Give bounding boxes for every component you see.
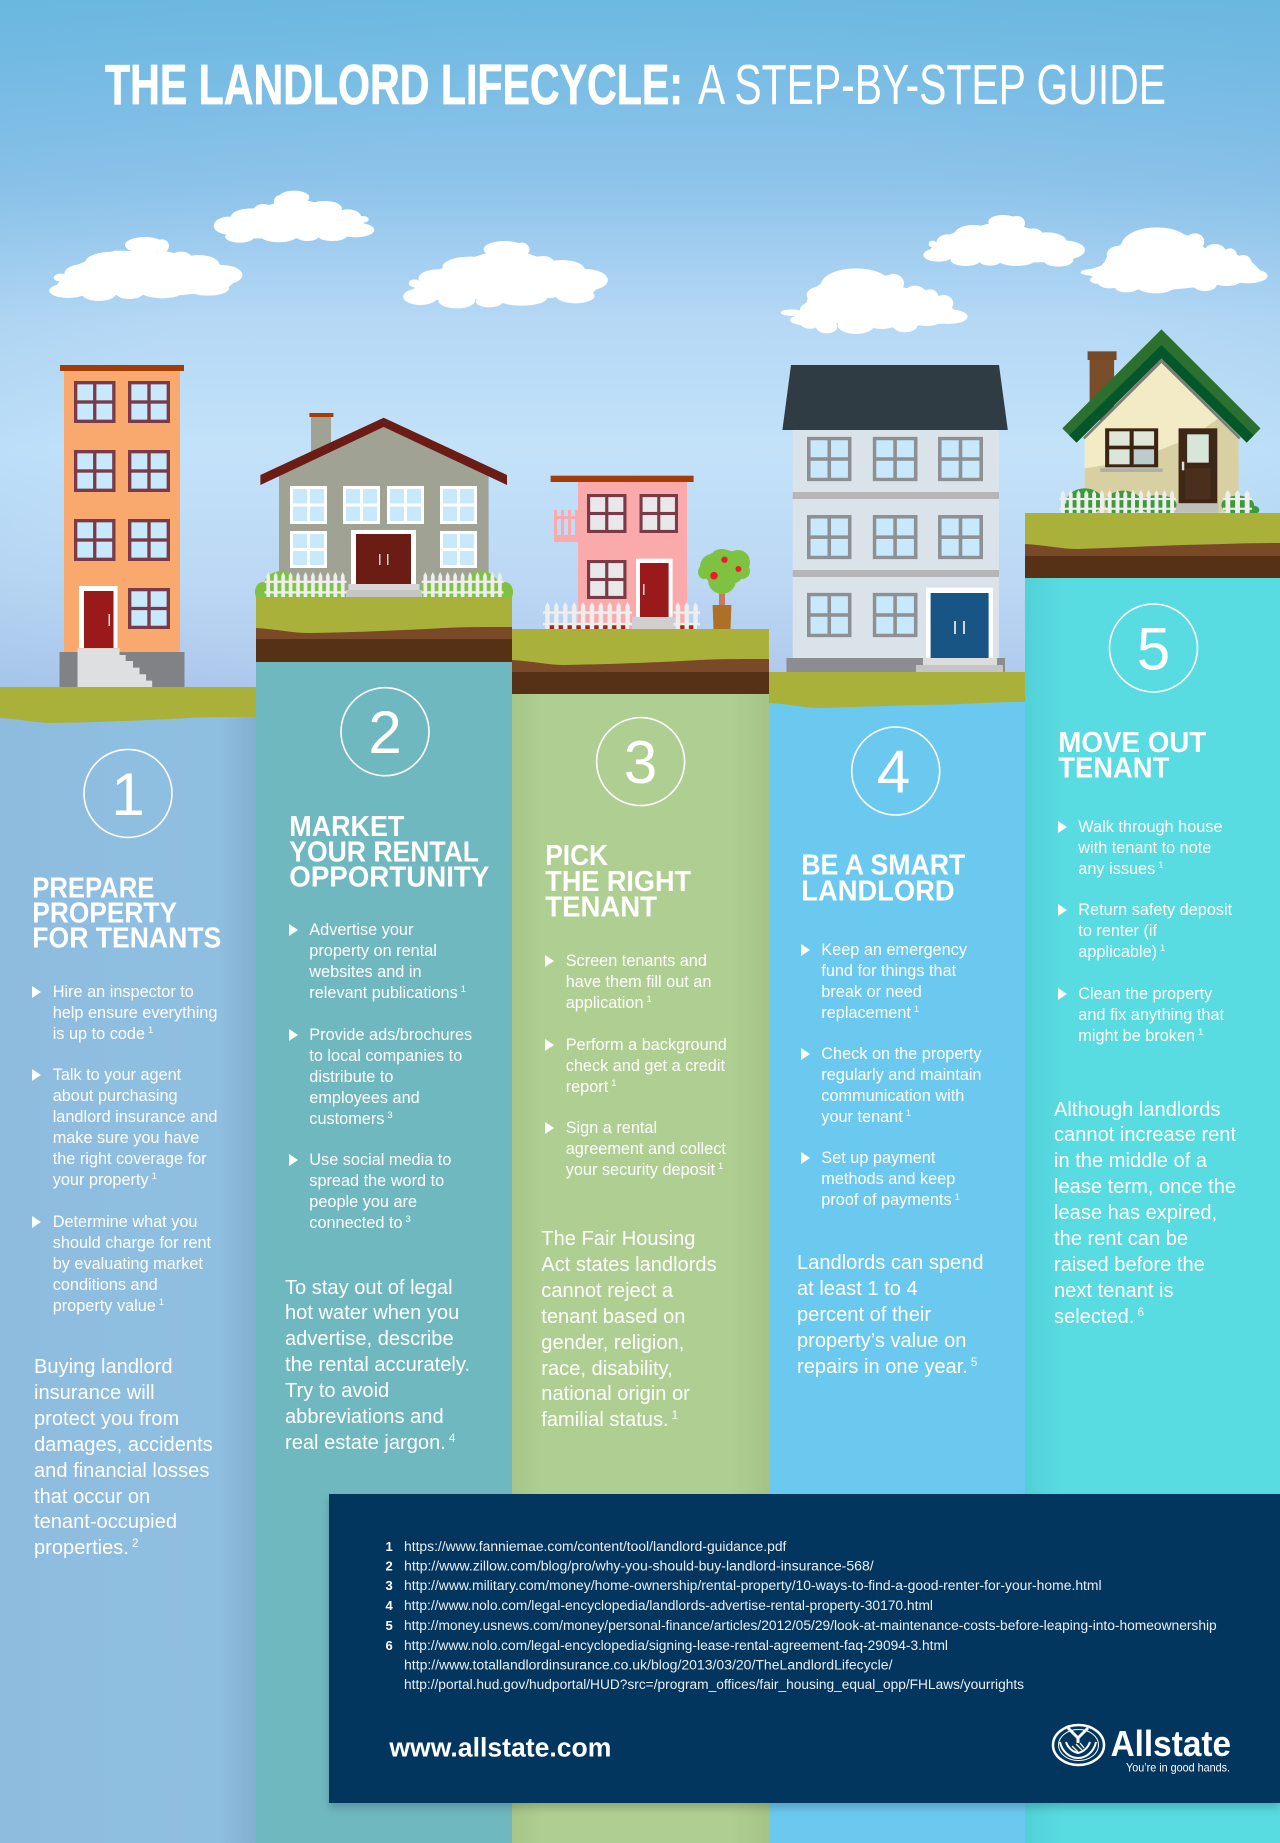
footer source list and logo	[386, 1539, 1231, 1775]
ground: step 1	[0, 687, 256, 723]
step 5 number badge and heading: 5	[1137, 616, 1170, 682]
step 1 bullet: inspector: Hire an inspector to	[53, 982, 194, 1000]
panel: step 4 smart landlord	[769, 690, 1025, 1843]
step 2 bullet: advertise: relevant publications 1	[309, 984, 466, 1002]
step 3 paragraph: The Fair Housing	[541, 1228, 695, 1250]
step 2 bullet: advertise	[309, 920, 466, 1006]
step 5 bullet: walk through: with tenant to note	[1078, 838, 1211, 856]
step 2 paragraph: abbreviations and	[285, 1406, 444, 1428]
step 1 bullet: inspector: is up to code 1	[53, 1024, 153, 1042]
step 3 number badge and heading: THE RIGHT	[545, 866, 692, 898]
step 3 bullet: background check: report 1	[566, 1078, 616, 1096]
source urls: http://portal.hud.gov/hudportal/HUD?src=/program_offices/fair_housing_equal_opp/FHLaws/yourrights	[404, 1677, 1024, 1692]
step 5 number badge and heading	[1058, 603, 1207, 785]
step 1 number badge and heading: PROPERTY	[32, 897, 177, 929]
step 2 bullet: brochures	[309, 1024, 472, 1132]
step 4 bullet: emergency fund: fund for things that	[821, 962, 956, 980]
building 4: tall grey house	[782, 365, 1008, 672]
step 1 bullet: rent: property value 1	[53, 1297, 164, 1315]
step 4 bullet: payment: methods and keep	[821, 1170, 955, 1188]
step 3 paragraph: tenant based on	[541, 1306, 685, 1328]
step 5 bullet: walk through	[1078, 816, 1222, 882]
step 1 bullet: rent: should charge for rent	[53, 1234, 211, 1252]
panel: step 2 market rental	[256, 662, 512, 1843]
step 1 bullet: agent: about purchasing	[53, 1087, 178, 1105]
cloud: lower middle	[403, 241, 608, 308]
step 2 paragraph	[285, 1276, 470, 1454]
step 5 bullet: walk through: Walk through house	[1078, 818, 1222, 836]
building 5: cream cottage	[1059, 329, 1261, 516]
step 5 paragraph: lease term, once the	[1054, 1176, 1236, 1198]
source urls: http://www.zillow.com/blog/pro/why-you-should-buy-landlord-insurance-568/	[404, 1558, 874, 1574]
step 1 paragraph: damages, accidents	[34, 1434, 213, 1456]
step 2 bullet: brochures: employees and	[309, 1088, 420, 1106]
step 1 bullet: inspector: help ensure everything	[53, 1004, 217, 1022]
step 2 number badge and heading: MARKET	[289, 811, 405, 843]
step 2 paragraph: hot water when you	[285, 1302, 459, 1324]
step 1 number badge and heading: PREPARE	[32, 872, 154, 904]
step 1 bullet: rent: conditions and	[53, 1276, 158, 1294]
step 3 bullet: screen	[566, 951, 711, 1016]
step 1 bullet: agent: Talk to your agent	[53, 1066, 181, 1084]
step 1 bullet: rent	[53, 1212, 211, 1319]
step 5 bullet: deposit: to renter (if	[1078, 922, 1157, 940]
step 5 bullet: walk through: any issues 1	[1078, 860, 1163, 878]
step 2 bullet: brochures: distribute to	[309, 1068, 393, 1086]
step 3 number badge and heading: 3	[624, 729, 657, 796]
ground: step 5	[1025, 513, 1280, 578]
step 3 paragraph: cannot reject a	[541, 1280, 673, 1302]
step 1 bullet: agent: landlord insurance and	[53, 1108, 217, 1126]
step 3 bullet: screen: have them fill out an	[566, 973, 711, 991]
source numbers: 6	[386, 1638, 393, 1653]
step 2 number badge and heading: OPPORTUNITY	[289, 862, 489, 894]
source urls: http://www.military.com/money/home-ownership/rental-property/10-ways-to-find-a-good-renter-for-your-home.html	[404, 1578, 1102, 1593]
step 2 bullet: social media	[309, 1150, 451, 1236]
step 4 bullet: check property: communication with	[821, 1086, 964, 1104]
source urls: https://www.fanniemae.com/content/tool/landlord-guidance.pdf	[404, 1539, 787, 1554]
step 5 bullet: deposit: Return safety deposit	[1078, 901, 1232, 919]
step 3 number badge and heading: TENANT	[545, 892, 658, 924]
step 1 bullet: agent: your property 1	[53, 1171, 157, 1189]
step 4 number badge and heading: BE A SMART	[801, 849, 966, 881]
step 4 paragraph	[797, 1252, 984, 1378]
step 2 bullet: social media: people you are	[309, 1193, 417, 1211]
step 4 number badge and heading: LANDLORD	[801, 875, 955, 907]
icon: allstate hands logo	[1053, 1725, 1104, 1765]
step 4 bullet: emergency fund: break or need	[821, 983, 922, 1001]
step 1 paragraph: protect you from	[34, 1408, 179, 1430]
footer: sources and branding panel	[329, 1494, 1280, 1803]
step 2 bullet: brochures: customers 3	[309, 1110, 393, 1128]
step 4 bullet: check property: regularly and maintain	[821, 1066, 982, 1084]
step 3 paragraph: gender, religion,	[541, 1332, 684, 1354]
step 5 paragraph: Although landlords	[1054, 1098, 1220, 1120]
step 4 bullet: emergency fund: replacement 1	[821, 1004, 919, 1022]
step 2 bullet: brochures: Provide ads/brochures	[309, 1026, 472, 1044]
step 3 bullet: agreement: agreement and collect	[566, 1140, 726, 1158]
step 2 paragraph: Try to avoid	[285, 1380, 389, 1402]
step 1 paragraph: and financial losses	[34, 1460, 209, 1482]
step 1 paragraph: tenant-occupied	[34, 1511, 177, 1533]
allstate wordmark: Allstate	[1111, 1723, 1231, 1764]
tree in pot	[698, 549, 750, 629]
step 1 bullet: inspector	[53, 982, 217, 1046]
step 3 bullet: background check: Perform a background	[566, 1036, 727, 1054]
step 5 paragraph	[1054, 1098, 1236, 1328]
step 5 bullet: deposit: applicable) 1	[1078, 943, 1165, 961]
step 3 bullet: agreement	[566, 1118, 726, 1183]
step 3 paragraph	[541, 1228, 717, 1431]
step 1 bullet: agent	[53, 1065, 217, 1193]
step 1 number badge and heading: FOR TENANTS	[32, 923, 221, 955]
title: THE LANDLORD LIFECYCLE:	[105, 53, 683, 117]
website url: www.allstate.com	[388, 1733, 611, 1763]
panel: step 1 prepare property	[0, 700, 256, 1843]
step 1 paragraph	[34, 1356, 213, 1559]
step 3 bullet: screen: application 1	[566, 994, 652, 1012]
step 4 number badge and heading: 4	[877, 738, 910, 806]
cloud: upper middle	[214, 191, 374, 243]
step 3 bullet: agreement: Sign a rental	[566, 1119, 657, 1137]
step 2 number badge and heading: 2	[368, 699, 402, 766]
step 4 bullet: emergency fund	[821, 940, 967, 1026]
step 3 paragraph: familial status. 1	[541, 1409, 678, 1431]
step 5 bullet: clean: might be broken 1	[1078, 1026, 1203, 1044]
step 3 bullet: screen: Screen tenants and	[566, 952, 707, 970]
cloud: upper right middle	[923, 215, 1085, 267]
step 1 number badge and heading	[32, 748, 221, 955]
cloud: left	[49, 237, 242, 301]
step 3 bullet: background check: check and get a credit	[566, 1057, 725, 1075]
step 5 number badge and heading: TENANT	[1058, 753, 1170, 785]
step 2 number badge and heading	[289, 686, 489, 894]
step 4 number badge and heading	[801, 726, 966, 907]
ground: step 2	[256, 597, 512, 662]
step 3 paragraph: Act states landlords	[541, 1254, 717, 1276]
ground: step 4	[769, 672, 1025, 708]
building 1: orange apartment	[60, 365, 184, 687]
source urls	[404, 1539, 1217, 1692]
step 4 bullet: check property: Check on the property	[821, 1044, 982, 1062]
step 1 bullet: rent: by evaluating market	[53, 1255, 203, 1273]
step 2 bullet: brochures: to local companies to	[309, 1046, 462, 1064]
step 2 bullet: social media: Use social media to	[309, 1151, 451, 1169]
step 3 number badge and heading: PICK	[545, 840, 608, 872]
step 3 paragraph: national origin or	[541, 1383, 690, 1405]
step 2 paragraph: the rental accurately.	[285, 1354, 470, 1376]
step 3 bullet: agreement: your security deposit 1	[566, 1161, 723, 1179]
step 1 paragraph: Buying landlord	[34, 1356, 173, 1378]
source numbers: 4	[386, 1598, 394, 1613]
step 2 bullet: advertise: property on rental	[309, 942, 437, 960]
step 2 bullet: advertise: Advertise your	[309, 921, 413, 939]
step 4 bullet: payment: Set up payment	[821, 1149, 935, 1167]
step 2 bullet: social media: spread the word to	[309, 1172, 444, 1190]
source urls: http://www.nolo.com/legal-encyclopedia/landlords-advertise-rental-property-30170.html	[404, 1598, 933, 1613]
cloud: far right	[1081, 227, 1268, 293]
step 1 number badge and heading: 1	[111, 761, 145, 828]
step 5 paragraph: lease has expired,	[1054, 1202, 1217, 1224]
step 5 paragraph: selected. 6	[1054, 1306, 1144, 1328]
source urls: http://www.nolo.com/legal-encyclopedia/signing-lease-rental-agreement-faq-29094-3.html	[404, 1638, 948, 1653]
source urls: http://www.totallandlordinsurance.co.uk/blog/2013/03/20/TheLandlordLifecycle/	[404, 1658, 893, 1672]
step 1 paragraph: that occur on	[34, 1486, 150, 1508]
step 3 bullet: background check	[566, 1035, 727, 1100]
step 3 number badge and heading	[545, 716, 692, 924]
step 5 paragraph: raised before the	[1054, 1254, 1205, 1276]
building 2: grey house	[255, 413, 513, 609]
step 4 bullet: emergency fund: Keep an emergency	[821, 941, 967, 959]
step 1 bullet: agent: the right coverage for	[53, 1150, 207, 1168]
step 5 paragraph: the rent can be	[1054, 1228, 1188, 1250]
source urls: http://money.usnews.com/money/personal-finance/articles/2012/05/29/look-at-maintenance-costs-before-leaping-into-homeownership	[404, 1618, 1217, 1633]
step 1 bullet: agent: make sure you have	[53, 1129, 199, 1147]
step 2 paragraph: real estate jargon. 4	[285, 1432, 455, 1454]
step 1 bullet: rent: Determine what you	[53, 1213, 197, 1231]
step 1 paragraph: properties. 2	[34, 1537, 138, 1559]
step 5 bullet: clean: and fix anything that	[1078, 1006, 1224, 1024]
allstate wordmark: You’re in good hands.	[1126, 1761, 1230, 1775]
source numbers: 3	[386, 1578, 393, 1593]
step 2 number badge and heading: YOUR RENTAL	[289, 837, 479, 869]
step 5 paragraph: cannot increase rent	[1054, 1124, 1236, 1146]
building 3: pink house	[543, 476, 700, 629]
source numbers: 5	[386, 1618, 393, 1633]
source numbers	[386, 1539, 394, 1653]
step 5 number badge and heading: MOVE OUT	[1058, 727, 1207, 759]
step 4 bullet: check property: your tenant 1	[821, 1108, 911, 1126]
step 5 paragraph: next tenant is	[1054, 1280, 1174, 1302]
step 5 bullet: clean	[1078, 984, 1224, 1048]
step 4 paragraph: repairs in one year. 5	[797, 1356, 977, 1378]
step 4 bullet: payment: proof of payments 1	[821, 1191, 960, 1209]
step 2 bullet: advertise: websites and in	[309, 963, 422, 981]
ground: step 3	[512, 629, 769, 694]
step 5 bullet: deposit	[1078, 900, 1232, 965]
step 4 paragraph: Landlords can spend	[797, 1252, 984, 1274]
source numbers: 1	[386, 1539, 393, 1554]
step 2 paragraph: advertise, describe	[285, 1328, 454, 1350]
panel: step 5 move out	[1025, 578, 1280, 1843]
panel: step 3 pick tenant	[512, 694, 769, 1843]
step 2 bullet: social media: connected to 3	[309, 1214, 411, 1232]
step 4 bullet: payment	[821, 1148, 960, 1213]
step 4 paragraph: percent of their	[797, 1304, 931, 1326]
step 2 paragraph: To stay out of legal	[285, 1276, 453, 1298]
source numbers: 2	[386, 1558, 393, 1574]
step 3 paragraph: race, disability,	[541, 1358, 673, 1380]
step 5 paragraph: in the middle of a	[1054, 1150, 1207, 1172]
sky background	[0, 0, 1280, 730]
step 4 paragraph: property’s value on	[797, 1330, 966, 1352]
step 1 paragraph: insurance will	[34, 1382, 155, 1404]
step 4 bullet: check property	[821, 1044, 982, 1130]
cloud: lower right	[781, 268, 968, 334]
step 5 bullet: clean: Clean the property	[1078, 984, 1212, 1002]
step 4 paragraph: at least 1 to 4	[797, 1278, 918, 1300]
